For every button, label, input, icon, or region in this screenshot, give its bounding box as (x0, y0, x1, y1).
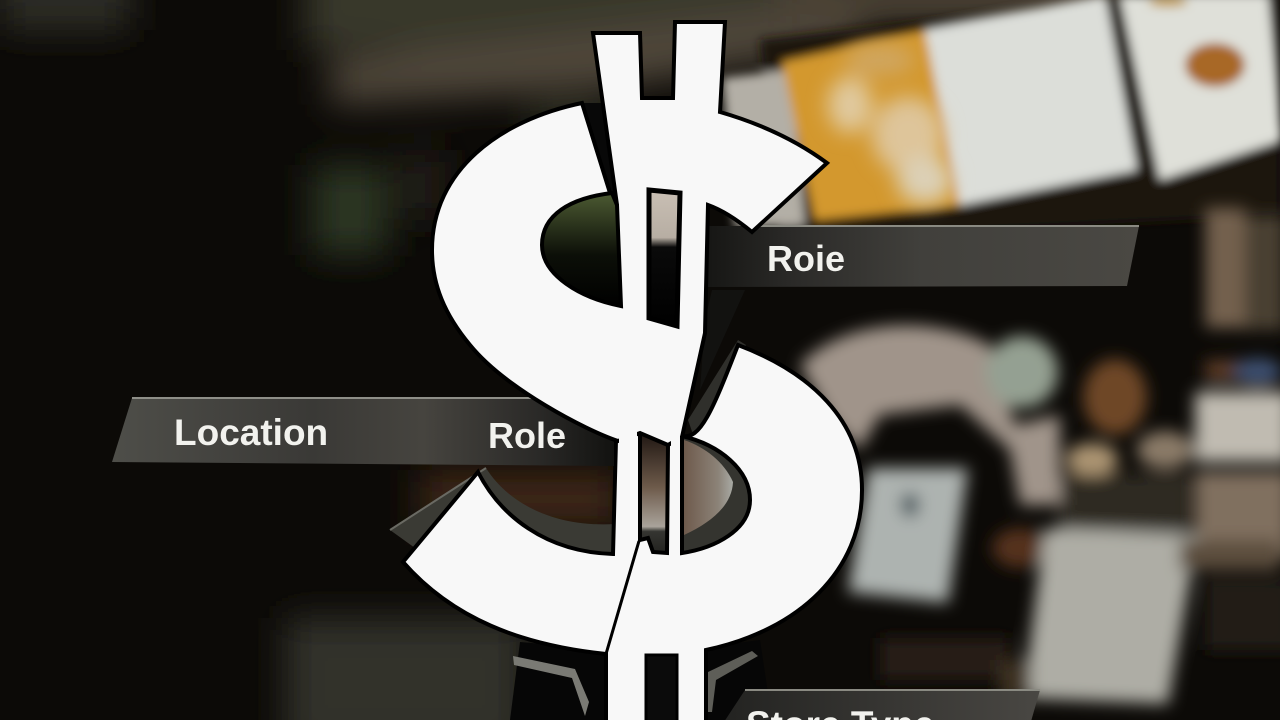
label: Role: Role (488, 415, 566, 456)
central slit (640, 433, 668, 553)
upper slit (649, 190, 680, 326)
dollar sign lower half (403, 345, 862, 720)
black base under the dollar sign (510, 640, 772, 720)
upper left counter (542, 193, 621, 306)
label: Roie: Roie (767, 238, 845, 279)
label band: Roie (706, 226, 1139, 287)
background: counter and staff (800, 208, 1280, 704)
crack (606, 541, 639, 720)
column join: left (619, 428, 637, 468)
label band: Location and Role (112, 398, 614, 466)
lower dollar sign 3D extrusion (390, 290, 746, 556)
background: menu boards (722, 0, 1280, 240)
column join: right (671, 430, 680, 470)
background: orange board highlights (828, 44, 953, 204)
crack between arc and prong (582, 103, 618, 207)
label: Location: Location (174, 412, 328, 453)
lower right counter (682, 436, 750, 553)
label band: Store Type (722, 690, 1040, 720)
dollar sign upper half (432, 22, 827, 470)
stem slit (646, 655, 677, 720)
